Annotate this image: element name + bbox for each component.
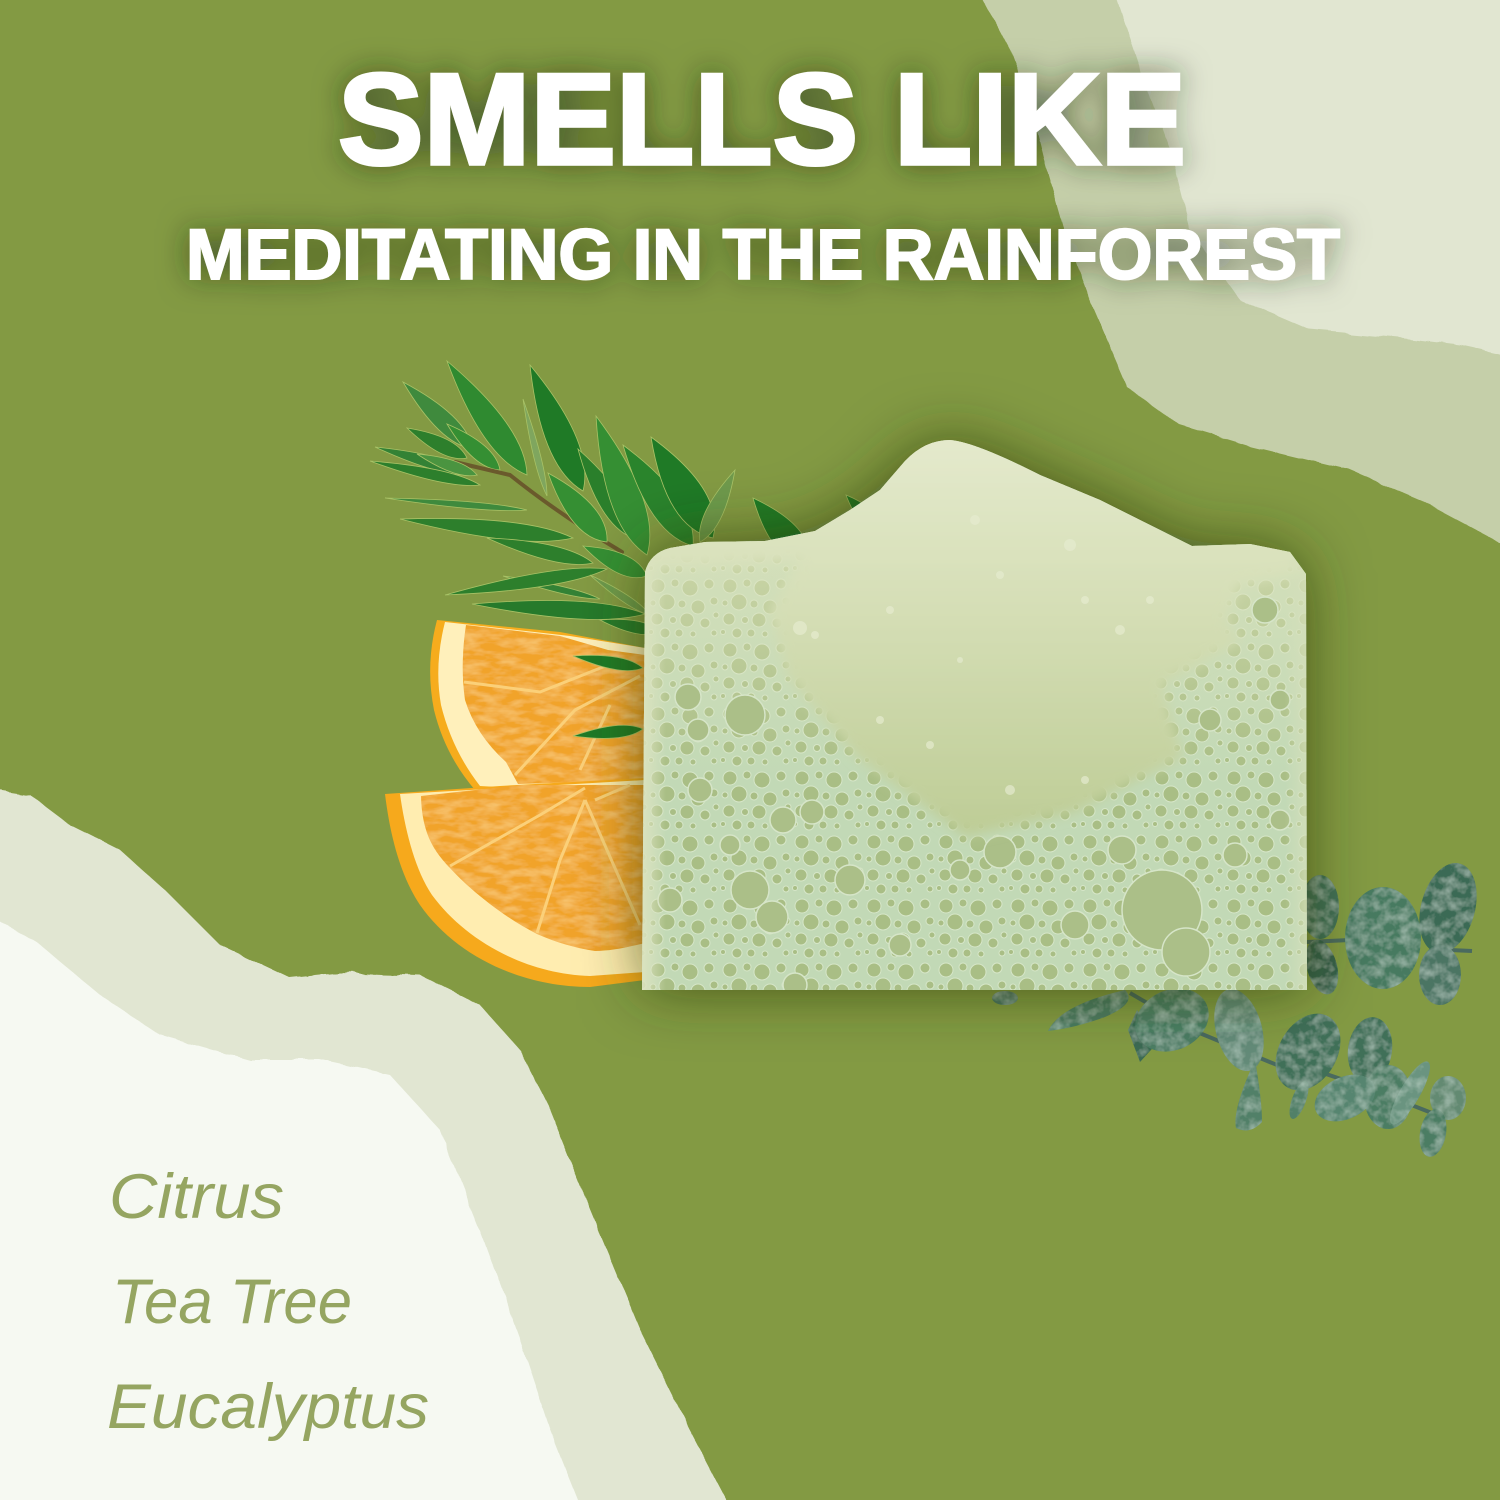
sprig stem xyxy=(455,462,622,552)
eucalyptus stems xyxy=(1130,940,1472,1115)
icon: tea tree sprig xyxy=(369,354,885,742)
soap edges xyxy=(642,561,662,990)
heading: smells like: SMELLS LIKE xyxy=(338,46,1186,192)
lower orange slice xyxy=(385,778,645,987)
soap smooth centre xyxy=(630,420,1320,837)
orange slices xyxy=(385,620,645,987)
soap bar xyxy=(630,420,1320,997)
icon: eucalyptus branch xyxy=(992,857,1486,1159)
soap foam xyxy=(640,430,1310,995)
scent: eucalyptus: Eucalyptus xyxy=(107,1372,429,1442)
scent: citrus: Citrus xyxy=(109,1162,284,1232)
title xyxy=(186,46,1340,295)
torn paper: bottom left xyxy=(0,789,732,1500)
scent: tea tree: Tea Tree xyxy=(112,1267,352,1337)
soap large bubbles xyxy=(658,597,1290,997)
torn paper: top right xyxy=(978,0,1500,548)
soap speckles xyxy=(793,515,1154,795)
eucalyptus leaves xyxy=(992,857,1486,1159)
upper orange slice xyxy=(430,620,645,795)
scent list xyxy=(107,1162,429,1442)
heading: meditating in the rainforest: MEDITATING IN THE RAINFOREST xyxy=(186,216,1340,295)
